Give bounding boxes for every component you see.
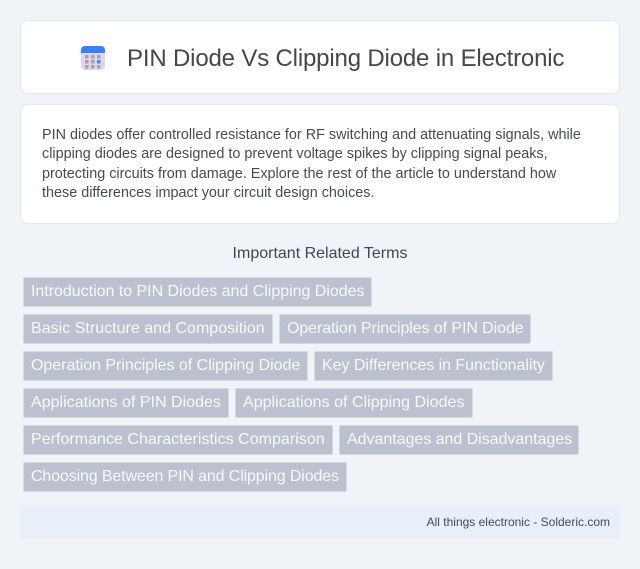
tag	[339, 425, 579, 455]
text block: intro: PIN diodes offer controlled resistance for RF switching and attenuating signals, while	[42, 126, 581, 142]
tag: Applications of PIN Diodes	[31, 394, 221, 411]
tag	[23, 425, 333, 455]
tag	[23, 388, 229, 418]
text block: intro: protecting circuits from damage. Explore the rest of the article to understand how	[42, 166, 556, 182]
tag	[235, 388, 473, 418]
footer bar	[20, 505, 620, 539]
tag: Choosing Between PIN and Clipping Diodes	[31, 468, 339, 485]
text block: intro: these differences impact your circuit design choices.	[42, 185, 374, 201]
tag: Basic Structure and Composition	[31, 320, 265, 337]
tag: Advantages and Disadvantages	[347, 431, 572, 448]
tag: Operation Principles of Clipping Diode	[31, 357, 300, 374]
footer text: All things electronic - Solderic.com	[427, 515, 610, 529]
title: PIN Diode Vs Clipping Diode in Electronic	[127, 45, 564, 72]
icon: calendar grid	[81, 46, 105, 70]
text block: intro: clipping diodes are designed to prevent voltage spikes by clipping signal peaks,	[42, 146, 548, 162]
tag: Introduction to PIN Diodes and Clipping Diodes	[31, 283, 364, 300]
tag: Applications of Clipping Diodes	[243, 394, 465, 411]
heading: related terms: Important Related Terms	[233, 245, 407, 262]
tag	[279, 314, 531, 344]
tag	[23, 351, 308, 381]
tag: Operation Principles of PIN Diode	[287, 320, 524, 337]
tag	[23, 462, 347, 492]
tag	[23, 314, 273, 344]
tag: Key Differences in Functionality	[322, 357, 545, 374]
panel: intro paragraph	[20, 104, 620, 224]
tag	[23, 277, 372, 307]
tag	[314, 351, 553, 381]
header card	[20, 20, 620, 94]
text block: intro	[42, 126, 581, 201]
tag: Performance Characteristics Comparison	[31, 431, 325, 448]
tag list	[23, 277, 579, 492]
